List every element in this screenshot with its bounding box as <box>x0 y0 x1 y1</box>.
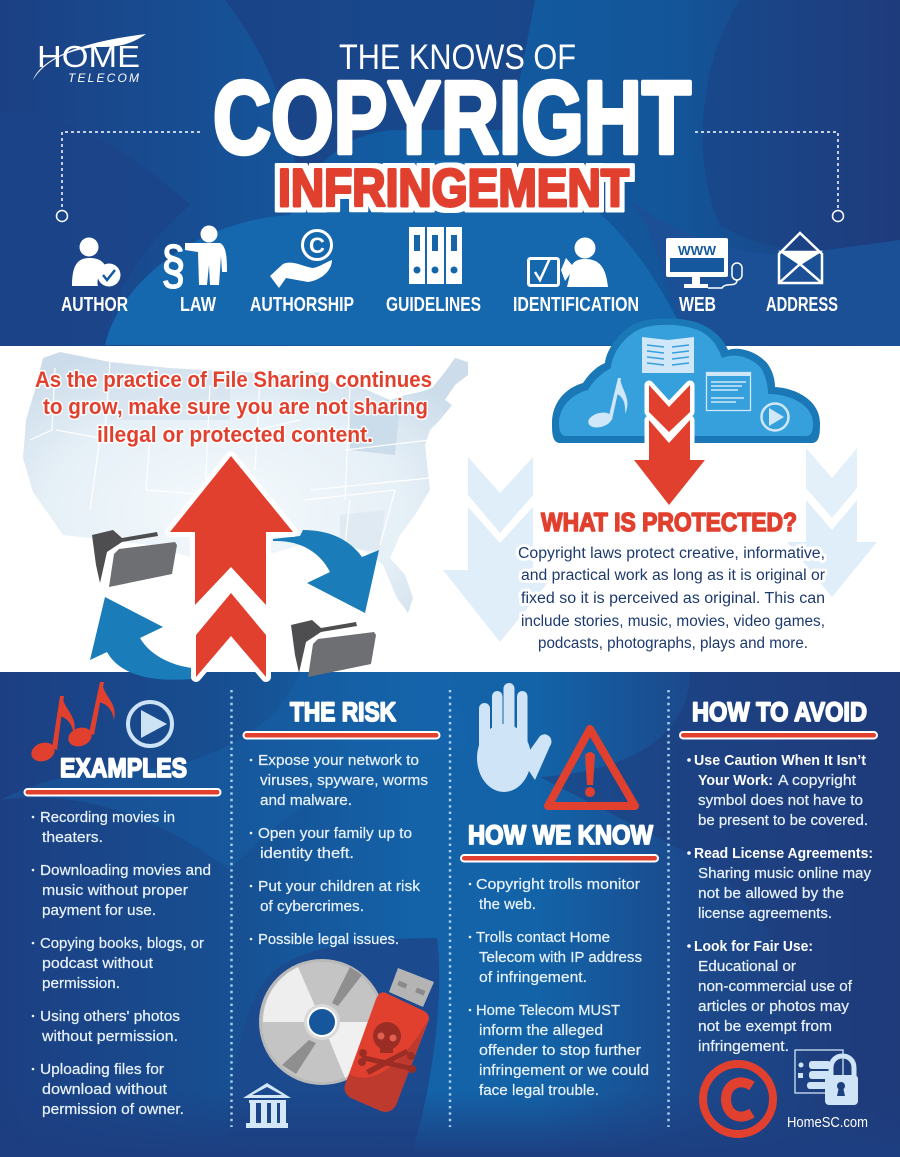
icon: play button <box>128 702 172 746</box>
dotted bracket right <box>695 132 844 222</box>
icon: folder bottom right <box>291 620 376 677</box>
red headline <box>35 367 432 447</box>
how to avoid list: Use Caution When It Isn’t <box>694 752 866 769</box>
risk list: viruses, spyware, worms <box>260 772 428 789</box>
protected body text: include stories, music, movies, video games, <box>521 613 825 630</box>
heading: what is protected: WHAT IS PROTECTED? <box>541 507 797 537</box>
icon labels: WEB <box>679 294 716 316</box>
logo: HOME <box>37 39 140 74</box>
column: the risk <box>243 697 440 1128</box>
icon labels: AUTHORSHIP <box>250 294 354 316</box>
column: how to avoid <box>680 697 877 1134</box>
how we know list: of infringement. <box>479 969 587 986</box>
red headline: As the practice of File Sharing continues <box>35 367 432 392</box>
heading: the risk: THE RISK <box>290 697 396 727</box>
logo <box>33 34 146 85</box>
protected body text: fixed so it is perceived as original. This can <box>521 590 825 607</box>
risk list: and malware. <box>260 792 352 809</box>
big red up arrow <box>170 456 293 677</box>
heading: how to avoid: HOW TO AVOID <box>692 697 867 727</box>
how to avoid list: Read License Agreements: <box>694 845 873 862</box>
icon labels: AUTHOR <box>61 294 128 316</box>
icon: authorship <box>270 230 332 288</box>
icon labels: LAW <box>180 294 216 316</box>
protected body text <box>518 545 825 652</box>
how we know list: infringement or we could <box>479 1062 649 1079</box>
risk list: identity theft. <box>260 845 354 862</box>
risk list: Open your family up to <box>258 825 412 842</box>
icon: web monitor: WWW <box>678 243 717 258</box>
examples list: theaters. <box>42 829 103 846</box>
icon: web monitor <box>666 238 742 288</box>
how to avoid list: A copyright <box>778 772 857 789</box>
heading: examples: EXAMPLES <box>60 753 187 783</box>
bottom panel <box>0 672 900 1157</box>
icon: code window <box>706 372 751 410</box>
risk list <box>250 752 428 948</box>
risk list: Possible legal issues. <box>258 931 399 948</box>
how to avoid list: be present to be covered. <box>698 812 868 829</box>
icon: red usb drive with skull <box>345 968 434 1112</box>
examples list: podcast without <box>42 955 154 972</box>
icon: compact disc <box>259 959 385 1085</box>
middle panel <box>0 318 900 680</box>
icon labels: ADDRESS <box>766 294 838 316</box>
pale arrow right <box>787 448 877 597</box>
icon labels: IDENTIFICATION <box>513 294 639 316</box>
how we know list: offender to stop further <box>479 1042 641 1059</box>
red underline <box>461 855 658 862</box>
how to avoid list: non-commercial use of <box>698 978 853 995</box>
icon: play button <box>762 404 788 430</box>
how to avoid list: license agreements. <box>698 905 832 922</box>
icon: address envelope <box>779 233 822 283</box>
red underline <box>680 732 877 738</box>
how to avoid list: Educational or <box>698 958 796 975</box>
examples list: download without <box>42 1081 168 1098</box>
protected body text: podcasts, photographs, plays and more. <box>538 635 808 652</box>
icon: music note <box>587 378 627 430</box>
how to avoid list: articles or photos may <box>698 998 850 1015</box>
examples list: Using others' photos <box>40 1008 180 1025</box>
protected body text: and practical work as long as it is original or <box>521 567 825 584</box>
examples list: music without proper <box>42 882 188 899</box>
column dividers <box>232 690 668 1127</box>
icon: music notes <box>29 682 115 765</box>
risk list: Expose your network to <box>258 752 419 769</box>
icon: copyright symbol <box>703 1064 773 1134</box>
examples list: Uploading files for <box>40 1061 164 1078</box>
icon: folder top left <box>92 530 177 587</box>
how to avoid list: not be allowed by the <box>698 885 844 902</box>
heading: how we know: HOW WE KNOW <box>468 820 653 850</box>
icon: book <box>642 337 694 373</box>
how we know list <box>469 876 649 1099</box>
examples list: payment for use. <box>42 902 156 919</box>
risk list: of cybercrimes. <box>260 898 364 915</box>
blue arrow right <box>273 530 379 613</box>
icon: warning triangle <box>548 729 635 806</box>
title: copyright: COPYRIGHT <box>213 60 691 175</box>
pale arrow left <box>443 457 558 642</box>
examples list: permission of owner. <box>42 1101 184 1118</box>
how we know list: Telecom with IP address <box>479 949 642 966</box>
red headline: to grow, make sure you are not sharing <box>43 394 428 419</box>
how to avoid list: symbol does not have to <box>698 792 863 809</box>
icon: author <box>72 238 120 286</box>
how we know list: the web. <box>479 896 536 913</box>
icon: law <box>162 226 227 295</box>
examples list: without permission. <box>41 1028 178 1045</box>
examples list: Recording movies in <box>40 809 175 826</box>
icon: stop hand <box>477 683 552 792</box>
column: examples <box>24 682 220 1118</box>
icon labels <box>61 294 838 316</box>
icon: identification <box>528 238 608 287</box>
how to avoid list: Sharing music online may <box>698 865 871 882</box>
logo: TELECOM <box>68 71 139 85</box>
column: how we know <box>461 683 658 1099</box>
red down arrow <box>634 385 705 505</box>
how we know list: Trolls contact Home <box>476 929 610 946</box>
how we know list: inform the alleged <box>479 1022 603 1039</box>
how to avoid list: infringement. <box>698 1038 789 1055</box>
icon: login window and padlock <box>795 1050 858 1105</box>
how to avoid list: not be exempt from <box>698 1018 832 1035</box>
icon: authorship: C <box>309 233 325 258</box>
examples list: permission. <box>42 975 120 992</box>
how we know list: Copyright trolls monitor <box>476 876 640 893</box>
how we know list: face legal trouble. <box>479 1082 599 1099</box>
how to avoid list: Your Work: <box>698 772 773 789</box>
how we know list: Home Telecom MUST <box>476 1002 620 1019</box>
icon: law: § <box>162 232 185 295</box>
icon labels: GUIDELINES <box>386 294 481 316</box>
website link: HomeSC.com <box>787 1114 868 1131</box>
examples list: Downloading movies and <box>40 862 211 879</box>
examples list: Copying books, blogs, or <box>40 935 204 952</box>
red underline <box>24 789 220 796</box>
red headline: illegal or protected content. <box>97 422 373 447</box>
icon: guidelines binders <box>409 227 462 284</box>
how to avoid list: Look for Fair Use: <box>694 938 813 955</box>
how to avoid list <box>687 752 873 1055</box>
header panel <box>0 0 900 346</box>
icon: cloud <box>552 318 820 443</box>
risk list: Put your children at risk <box>258 878 421 895</box>
blue arrow left <box>90 597 192 680</box>
icon: courthouse <box>243 1083 291 1128</box>
map of the united states <box>20 350 475 620</box>
examples list <box>32 809 211 1118</box>
protected body text: Copyright laws protect creative, informative, <box>518 545 825 562</box>
red underline <box>244 732 440 738</box>
dotted bracket left <box>56 132 200 222</box>
title: the knows of: THE KNOWS OF <box>339 38 576 77</box>
title: infringement: INFRINGEMENT <box>278 159 629 218</box>
